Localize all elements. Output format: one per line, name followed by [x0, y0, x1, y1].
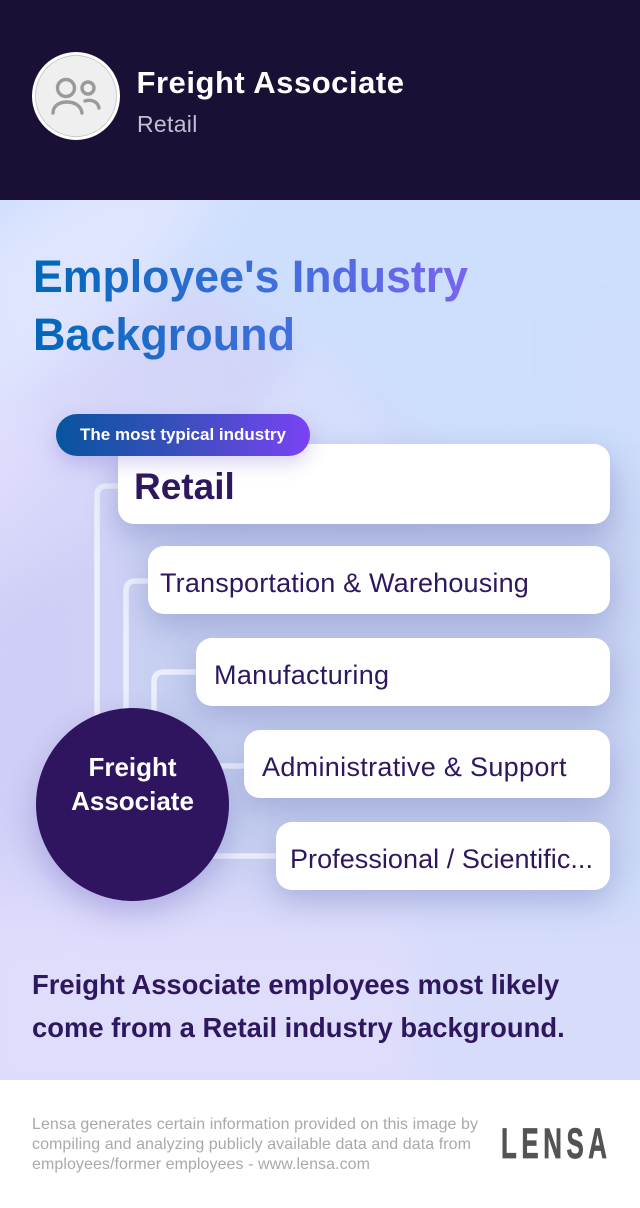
card: Professional / Scientific	[276, 822, 610, 890]
summary text: come from a Retail industry background.	[32, 1012, 565, 1043]
card label: Transportation & Warehousing	[160, 568, 529, 598]
center circle: Freight Associate	[36, 708, 229, 901]
card label: Retail	[134, 466, 235, 507]
card label: Manufacturing	[214, 660, 389, 690]
badge: most typical industry: The most typical industry	[80, 425, 286, 444]
summary text	[32, 969, 565, 1043]
card label: Professional / Scientific...	[290, 844, 593, 874]
header band	[0, 0, 640, 200]
card: Transportation & Warehousing	[148, 546, 610, 614]
icon: avatar with two people	[32, 52, 120, 140]
card: Manufacturing	[196, 638, 610, 706]
center circle: Freight Associate: Freight	[88, 752, 177, 782]
footer disclaimer	[32, 1116, 478, 1173]
title	[33, 251, 468, 360]
center circle: Freight Associate: Associate	[71, 786, 194, 816]
footer disclaimer: compiling and analyzing publicly available data and data from	[32, 1136, 471, 1153]
footer disclaimer: employees/former employees - www.lensa.com	[32, 1156, 370, 1173]
main panel: industry background	[0, 200, 640, 1080]
card label: Administrative & Support	[262, 752, 567, 782]
title: Employee's Industry	[33, 251, 468, 302]
soft background shapes	[0, 200, 640, 1080]
card: Administrative & Support	[244, 730, 610, 798]
card: Retail	[118, 444, 610, 524]
logo: LENSA: LENSA	[501, 1120, 612, 1168]
footer band	[0, 1080, 640, 1208]
footer disclaimer: Lensa generates certain information provided on this image by	[32, 1116, 478, 1132]
badge: most typical industry	[56, 414, 310, 456]
title: Background	[33, 309, 295, 360]
header industry: Retail	[137, 111, 198, 137]
summary text: Freight Associate employees most likely	[32, 969, 559, 1000]
header job title: Freight Associate	[136, 65, 404, 100]
